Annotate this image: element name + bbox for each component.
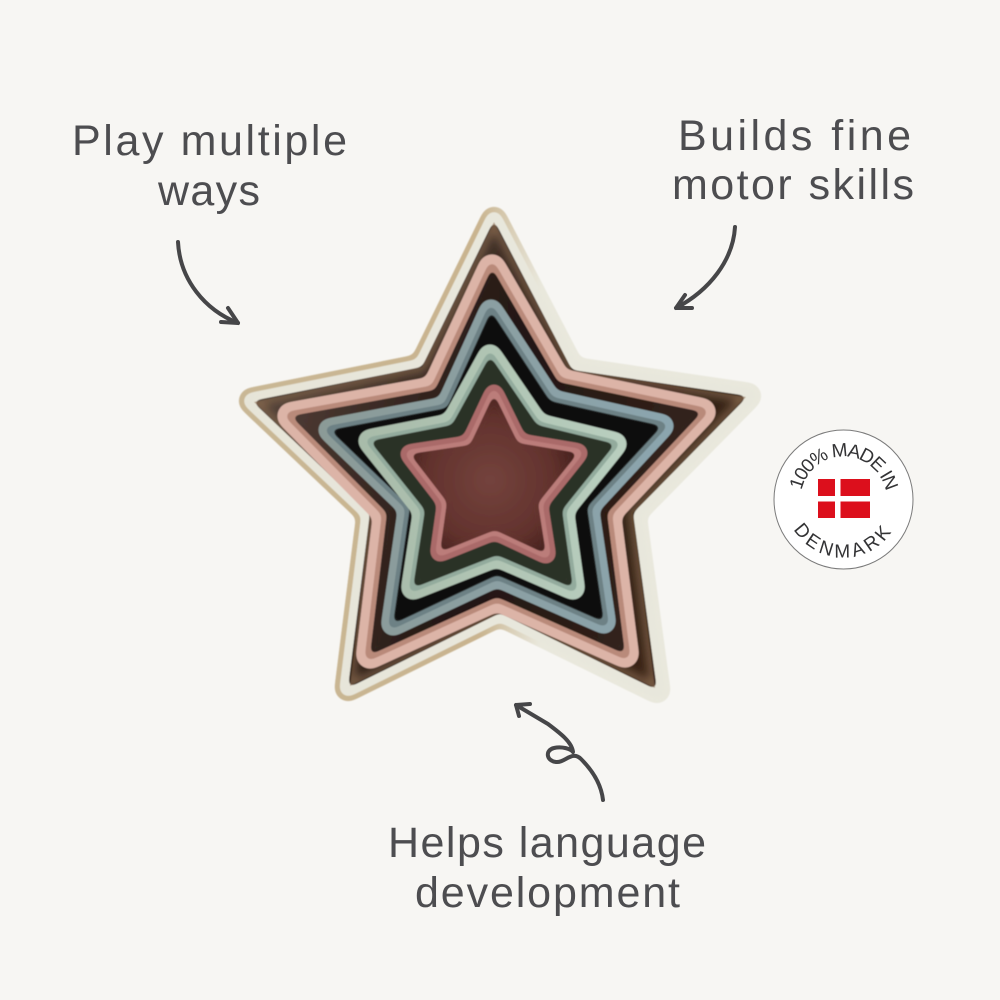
star layer 1: cream and tan	[252, 220, 748, 690]
text: helps language development	[388, 819, 706, 917]
badge: 100% made in Denmark	[774, 430, 914, 570]
star layer 2: pink	[291, 268, 702, 655]
badge text: bottom arc: DENMARK	[794, 522, 892, 558]
star stacking toy	[252, 220, 748, 690]
text: builds fine motor skills	[672, 112, 914, 209]
text: helps language development: development	[415, 869, 680, 917]
text: play multiple ways: Play multiple	[72, 117, 347, 165]
text: play multiple ways	[72, 117, 347, 215]
text: builds fine motor skills: motor skills	[672, 161, 914, 209]
text: helps language development: Helps language	[388, 819, 706, 867]
arrow: builds fine motor skills to star	[676, 227, 735, 308]
star layer 3: blue	[330, 311, 662, 624]
arrow: play multiple ways to star	[178, 242, 238, 323]
badge text: top arc: 100% MADE IN	[790, 443, 898, 490]
star layer 4: sage	[370, 356, 615, 588]
text: builds fine motor skills: Builds fine	[678, 112, 911, 160]
star layer 5: rose centre	[410, 394, 578, 554]
text: play multiple ways: ways	[157, 167, 260, 215]
arrow: language development to star	[516, 704, 603, 800]
icon: Danish flag	[818, 479, 870, 518]
